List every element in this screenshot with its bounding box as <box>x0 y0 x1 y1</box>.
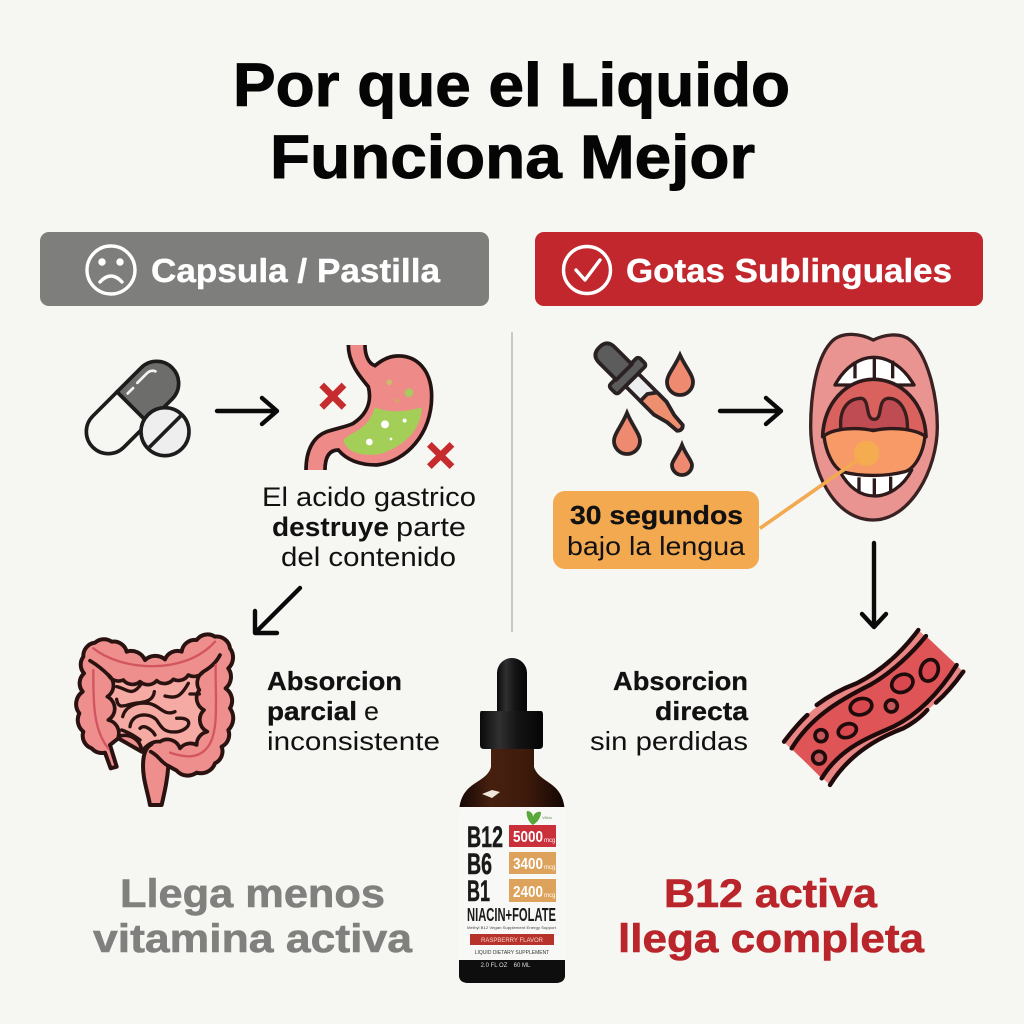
title: Funciona Mejor <box>270 123 755 191</box>
dose boxes <box>509 825 556 847</box>
product bottle: 2.0 FL OZ <box>481 963 508 969</box>
text: acid destroys: El acido gastrico <box>262 482 476 512</box>
text: complete B12: B12 activa <box>664 872 878 916</box>
text: acid destroys: parte <box>396 512 466 542</box>
label <box>459 807 565 960</box>
title: Por que el Liquido <box>233 51 790 119</box>
text: partial absorption: Absorcion <box>267 666 402 696</box>
title <box>233 51 790 191</box>
text: complete B12: llega completa <box>618 917 925 961</box>
header: capsula / pastilla <box>40 232 489 306</box>
product bottle: mcg <box>544 893 555 899</box>
arrow: capsule to stomach <box>217 398 277 424</box>
header: gotas sublinguales: Gotas Sublinguales <box>626 252 952 289</box>
product bottle: 3400 <box>513 856 543 873</box>
icon: drop top right <box>667 355 693 395</box>
text: acid destroys <box>262 482 476 572</box>
text: less active vitamin <box>93 872 413 961</box>
volume band <box>459 960 565 983</box>
arrow: stomach to intestine <box>255 588 300 633</box>
header: capsula / pastilla: Capsula / Pastilla <box>151 252 441 289</box>
product bottle: Methyl B12 Vegan Supplement Energy Support <box>467 925 557 930</box>
text: direct absorption: sin perdidas <box>590 726 748 756</box>
text: partial absorption: inconsistente <box>267 726 440 756</box>
product bottle: 60 ML <box>514 963 531 969</box>
arrow: dropper to mouth <box>720 398 781 424</box>
text: partial absorption: e <box>364 696 379 726</box>
vitamin names: B12 <box>467 821 503 854</box>
vitamin names <box>467 821 503 908</box>
palate <box>823 379 926 437</box>
text: complete B12 <box>618 872 925 961</box>
icon: dropper and drops <box>584 332 696 475</box>
icon: intestine <box>76 634 233 805</box>
product bottle: RASPBERRY FLAVOR <box>481 938 544 944</box>
bottle cap <box>480 711 543 749</box>
text: acid destroys: del contenido <box>281 542 456 572</box>
product bottle: mcg <box>544 865 555 871</box>
callout: 30 seconds <box>553 491 759 569</box>
icon: drop left <box>614 413 640 454</box>
text: partial absorption <box>267 666 440 756</box>
product bottle <box>459 658 565 983</box>
vitamin names: B6 <box>467 848 492 881</box>
logo <box>527 811 541 825</box>
icon: open mouth <box>760 334 937 528</box>
product bottle: mcg <box>544 838 555 844</box>
upper teeth <box>835 357 914 385</box>
icon: red cross upper <box>322 385 344 407</box>
callout: 30 seconds: 30 segundos <box>570 500 743 530</box>
text: direct absorption: Absorcion <box>613 666 748 696</box>
header: gotas sublinguales <box>535 232 983 306</box>
icon: drop bottom <box>672 445 692 475</box>
glass body <box>459 749 565 983</box>
product bottle: Vitbio <box>542 815 553 820</box>
icon: capsule and tablet <box>77 352 189 463</box>
callout: 30 seconds: bajo la lengua <box>567 531 746 561</box>
text: direct absorption: directa <box>655 696 749 726</box>
product bottle: LIQUID DIETARY SUPPLEMENT <box>475 950 549 956</box>
product bottle: 5000 <box>513 829 543 846</box>
text: acid destroys: destruye <box>272 512 389 542</box>
tongue <box>824 429 925 475</box>
arrow: mouth to bloodstream <box>862 543 886 627</box>
vitamin names: B1 <box>467 875 490 908</box>
niacin folate: NIACIN+FOLATE <box>467 905 556 925</box>
icon: stomach with acid <box>306 345 452 470</box>
text: partial absorption: parcial <box>267 696 357 726</box>
icon: check circle <box>564 246 610 294</box>
text: less active vitamin: vitamina activa <box>93 917 413 961</box>
icon: red cross lower <box>429 444 452 467</box>
flavor band <box>470 934 554 945</box>
product bottle: 2400 <box>513 884 543 901</box>
lower teeth <box>840 470 912 496</box>
text: direct absorption <box>590 666 749 756</box>
text: less active vitamin: Llega menos <box>120 872 385 916</box>
dropper bulb <box>497 658 527 712</box>
icon: sad face <box>87 246 135 294</box>
icon: blood vessel <box>783 630 963 785</box>
